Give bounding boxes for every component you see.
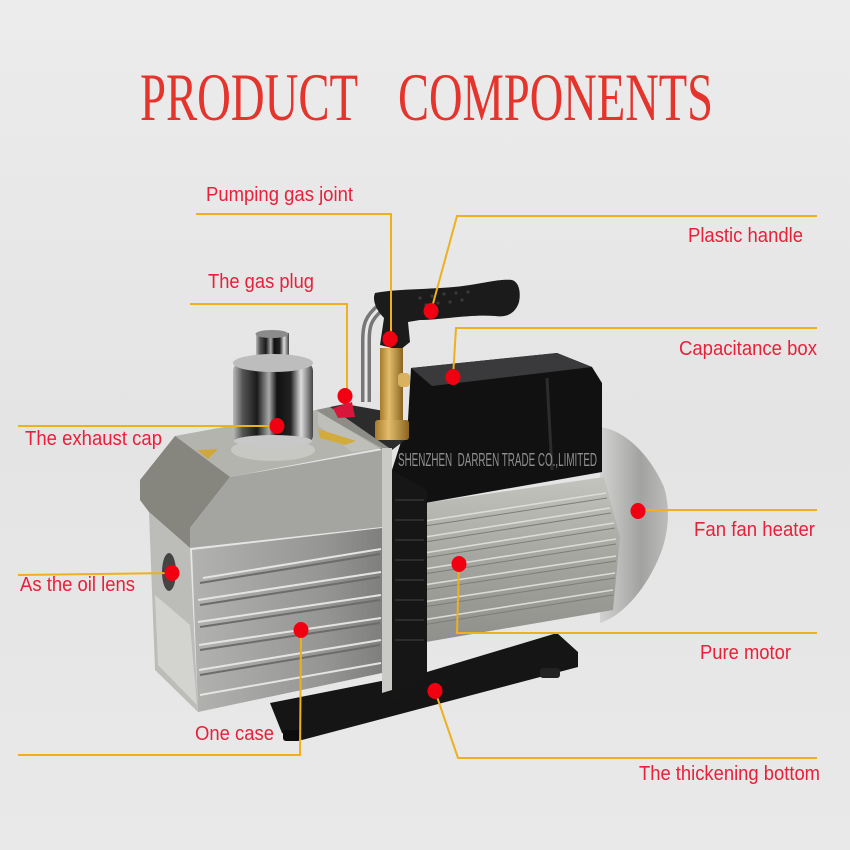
top surface — [175, 410, 382, 505]
chrome tube — [366, 308, 380, 402]
line: one case — [18, 630, 301, 755]
line: pure motor — [457, 564, 817, 633]
line: exhaust cap — [18, 425, 277, 427]
line: pumping gas joint — [196, 214, 391, 338]
label: one case: One case — [195, 723, 274, 745]
label: oil lens: As the oil lens — [20, 574, 135, 596]
label: exhaust cap: The exhaust cap — [25, 428, 162, 450]
handle — [374, 280, 520, 350]
line: thickening bottom — [435, 691, 817, 758]
line: oil lens — [18, 573, 172, 575]
marker dots — [164, 303, 646, 699]
label: thickening bottom: The thickening bottom — [639, 763, 820, 785]
left side panel — [149, 512, 198, 712]
label: capacitance box: Capacitance box — [679, 338, 817, 360]
front upper face — [190, 450, 382, 548]
leader lines — [18, 214, 817, 758]
title: COMPONENTS — [398, 59, 713, 135]
title — [140, 59, 713, 135]
label: gas plug: The gas plug — [208, 271, 314, 293]
motor fins — [420, 477, 620, 643]
watermark: SHENZHEN DARREN TRADE CO.,LIMITED — [398, 450, 597, 470]
label: pumping gas joint: Pumping gas joint — [206, 184, 353, 206]
line: plastic handle — [431, 216, 817, 311]
fan cover — [600, 427, 668, 623]
exhaust cap — [231, 330, 315, 461]
brass valve — [375, 348, 410, 440]
label: plastic handle: Plastic handle — [688, 225, 803, 247]
vacuum pump illustration — [140, 280, 668, 741]
top plate — [316, 407, 392, 450]
line: gas plug — [190, 304, 347, 396]
labels — [20, 184, 820, 785]
base plate — [270, 633, 578, 741]
warning labels — [197, 449, 218, 459]
label: fan heater: Fan fan heater — [694, 519, 815, 541]
black pillar — [392, 470, 427, 703]
red gas plug — [333, 402, 355, 418]
slanted left face — [140, 436, 230, 548]
title: PRODUCT — [140, 59, 358, 135]
black capacitance box — [392, 353, 602, 505]
label: pure motor: Pure motor — [700, 642, 791, 664]
line: fan — [638, 509, 817, 511]
line: capacitance box — [453, 328, 817, 377]
front grille case — [192, 528, 382, 712]
silver vertical strip — [382, 448, 392, 693]
